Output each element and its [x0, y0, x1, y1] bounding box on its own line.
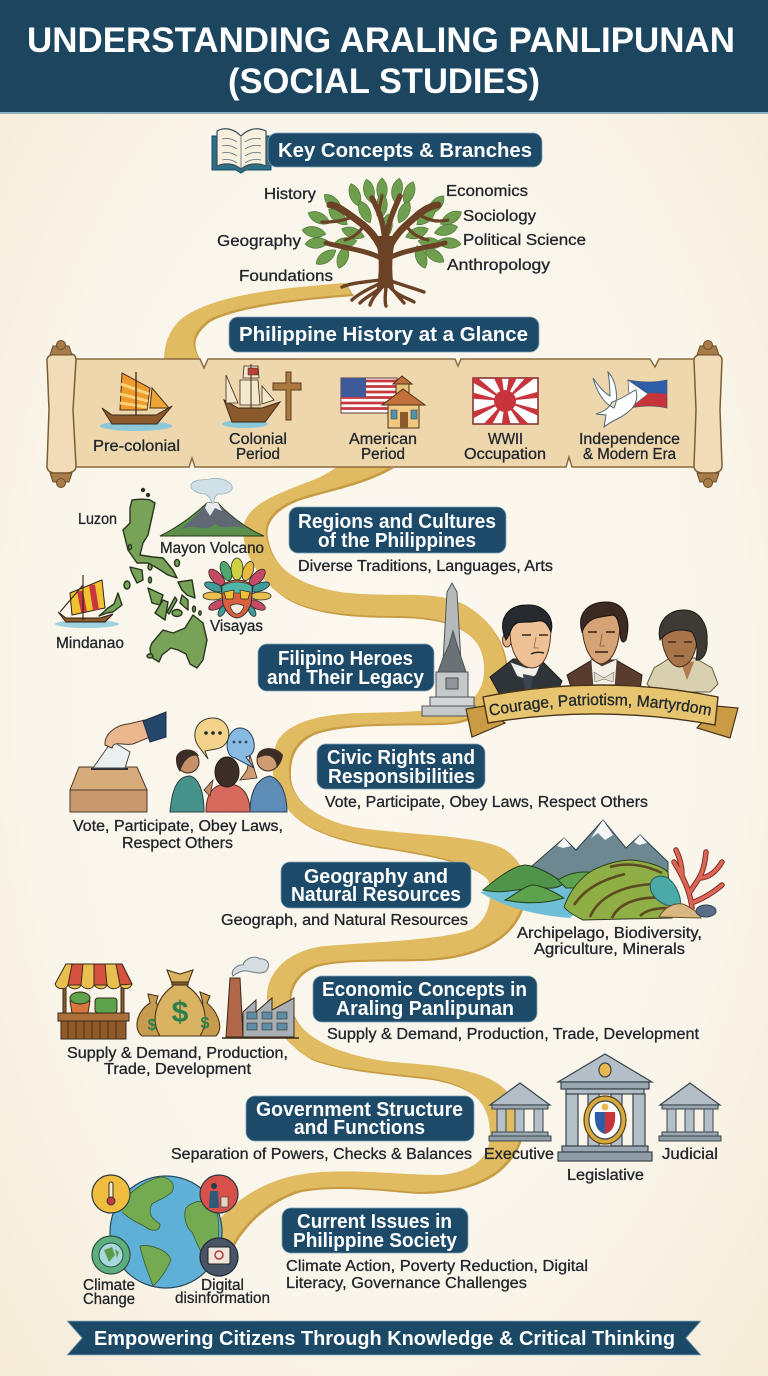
text: current issues caption [286, 1258, 588, 1292]
era labels: Period [236, 446, 280, 463]
branch labels [217, 183, 586, 285]
icon: tree of knowledge [301, 177, 464, 306]
branch labels: Geography [217, 233, 301, 250]
icon: coral [650, 850, 722, 918]
era labels: American [349, 431, 417, 448]
globe labels: Climate [83, 1277, 135, 1294]
heading: filipino heroes: Filipino Heroes [278, 648, 413, 670]
era labels: Pre-colonial [93, 438, 180, 455]
icon: globe with issue badges [92, 1175, 238, 1288]
badge: digital [200, 1238, 238, 1276]
government labels [484, 1146, 718, 1184]
heading: government: Government Structure [256, 1099, 463, 1121]
title band [0, 0, 768, 114]
icon: cross [273, 372, 301, 420]
heading: geography: Geography and [304, 866, 448, 888]
text: civic caption: Vote, Participate, Obey Laws, Respect Others [325, 794, 648, 811]
icon: legislative building [558, 1054, 652, 1161]
icon: festival mask [203, 558, 271, 618]
badge: poverty [200, 1175, 238, 1213]
globe labels: Change [83, 1291, 135, 1308]
branch labels: Political Science [463, 232, 586, 249]
heading: philippine history [229, 317, 539, 352]
era labels: Independence [579, 431, 680, 448]
icon: schoolhouse [382, 376, 425, 428]
text: civic caption left [73, 818, 283, 852]
portrait: hero one [490, 605, 562, 695]
icon: national seal [584, 1096, 626, 1144]
branch labels: Sociology [463, 208, 536, 225]
text: economics caption: Supply & Demand, Production, Trade, Development [327, 1026, 700, 1043]
text: current issues caption: Climate Action, Poverty Reduction, Digital [286, 1258, 588, 1275]
badge: climate [92, 1175, 130, 1213]
era labels: & Modern Era [583, 446, 676, 463]
heading: geography [281, 862, 471, 908]
footer banner: Empowering Citizens Through Knowledge & Critical Thinking [94, 1328, 675, 1350]
text: economics caption left: Supply & Demand, Production, [67, 1045, 288, 1062]
branch labels: History [264, 186, 316, 203]
icon: dove and philippine flag [593, 372, 667, 427]
era labels: Occupation [464, 446, 546, 463]
icon: open book [212, 129, 271, 173]
icon: ballot box with hand [70, 712, 166, 812]
heading: current issues [282, 1208, 468, 1253]
heading: regions and cultures [289, 507, 506, 553]
region labels: Mayon Volcano [160, 540, 264, 557]
scroll roller: left [47, 340, 76, 488]
region labels [56, 511, 264, 652]
heading: economic concepts: Araling Panlipunan [336, 998, 514, 1020]
icon: money bags: $ [172, 996, 189, 1029]
winding golden path [164, 283, 526, 1252]
text: geography caption right [517, 925, 702, 958]
text: current issues caption: Literacy, Governance Challenges [286, 1275, 527, 1292]
globe labels: Digital [201, 1277, 244, 1294]
heading: current issues: Philippine Society [293, 1230, 458, 1252]
icon: money bags: $ [148, 1017, 157, 1034]
panel: history scroll [47, 340, 722, 488]
era labels: Period [361, 446, 405, 463]
icon: executive building [489, 1083, 551, 1141]
heading: economic concepts [313, 976, 537, 1022]
globe labels: disinformation [175, 1290, 270, 1307]
heading: key concepts: Key Concepts & Branches [278, 140, 532, 162]
scroll roller: right [694, 340, 722, 488]
region labels: Visayas [210, 618, 263, 635]
text: regions caption: Diverse Traditions, Languages, Arts [298, 558, 553, 575]
icon: market stall [55, 964, 132, 1039]
branch labels: Foundations [239, 268, 333, 285]
era labels [93, 431, 680, 463]
heading: government: and Functions [294, 1117, 425, 1139]
banner: courage: Courage, Patriotism, Martyrdom [489, 693, 711, 716]
icon: money bags: $ [201, 1015, 210, 1032]
heading: key concepts [268, 133, 542, 167]
heading: filipino heroes [258, 644, 434, 691]
text: economics caption left: Trade, Development [104, 1061, 252, 1078]
icon: money bags [137, 970, 220, 1036]
icon: judicial building [659, 1083, 721, 1141]
title band: UNDERSTANDING ARALING PANLIPUNAN [27, 21, 735, 60]
icon: galleon [222, 364, 280, 428]
heading: philippine history: Philippine History at a Glance [239, 324, 528, 346]
globe labels [83, 1277, 270, 1308]
region labels: Luzon [78, 511, 117, 528]
heading: regions and cultures: of the Philippines [318, 530, 476, 552]
icon: rizal monument [422, 583, 475, 716]
icon: landscape [480, 820, 722, 920]
title band: (SOCIAL STUDIES) [228, 62, 540, 101]
icon: factory [222, 957, 299, 1038]
banner: courage [465, 684, 739, 739]
icon: american flag [341, 378, 397, 413]
footer banner [67, 1321, 701, 1355]
heading: geography: Natural Resources [291, 884, 461, 906]
government labels: Legislative [567, 1167, 644, 1184]
text: geography caption right: Archipelago, Biodiversity, [517, 925, 702, 942]
portrait: hero two [567, 602, 642, 690]
text: geography caption right: Agriculture, Minerals [534, 941, 685, 958]
icon: speech bubbles [195, 718, 254, 768]
map of the philippines [99, 488, 207, 668]
icon: rising sun flag [472, 377, 539, 425]
heading: current issues: Current Issues in [297, 1211, 452, 1233]
icon: citizens discussing [170, 718, 287, 812]
branch labels: Economics [446, 183, 528, 200]
text: civic caption left: Vote, Participate, Obey Laws, [73, 818, 283, 835]
text: government caption: Separation of Powers, Checks & Balances [171, 1146, 472, 1163]
heading: filipino heroes: and Their Legacy [267, 667, 425, 689]
text: economics caption left [67, 1045, 288, 1078]
heading: civic rights: Responsibilities [328, 766, 475, 788]
government labels: Executive [484, 1146, 554, 1163]
text: geography caption: Geograph, and Natural Resources [221, 912, 468, 929]
era labels: Colonial [229, 431, 287, 448]
portraits of heroes [465, 602, 739, 739]
heading: civic rights: Civic Rights and [327, 747, 475, 769]
heading: regions and cultures: Regions and Cultures [298, 511, 496, 533]
era labels: WWII [488, 431, 523, 448]
branch labels: Anthropology [447, 257, 550, 274]
icon: vinta boat [55, 575, 119, 628]
portrait: hero three [647, 610, 718, 692]
badge: green earth [92, 1236, 130, 1274]
heading: economic concepts: Economic Concepts in [322, 979, 527, 1001]
icon: pre-colonial boat [100, 372, 172, 431]
government labels: Judicial [662, 1146, 718, 1163]
region labels: Mindanao [56, 635, 124, 652]
heading: government [246, 1096, 474, 1141]
heading: civic rights [317, 744, 485, 789]
icon: mayon volcano [160, 478, 264, 536]
text: civic caption left: Respect Others [122, 835, 233, 852]
